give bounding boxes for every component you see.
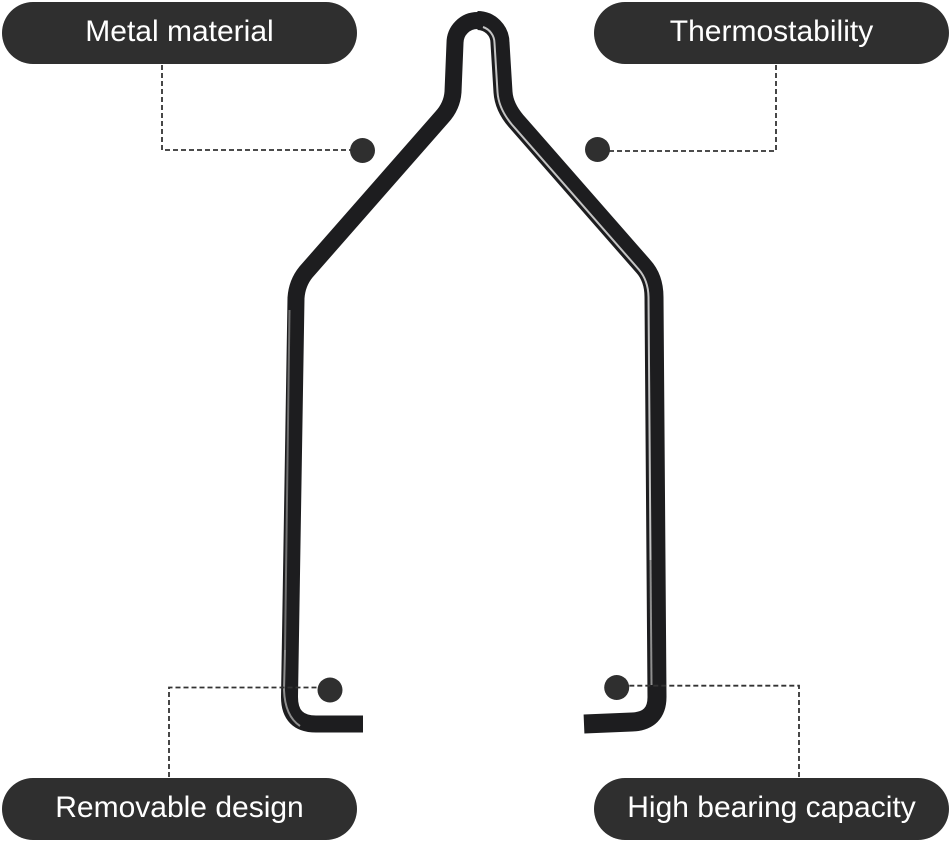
leader: removable design [169, 678, 342, 777]
label: high bearing capacity: High bearing capacity [627, 791, 916, 824]
label: removable design: Removable design [55, 791, 304, 824]
leader: thermostability [585, 65, 776, 162]
leader: metal material [162, 65, 375, 163]
label: high bearing capacity [594, 778, 949, 840]
wire clip [284, 20, 657, 726]
label: metal material: Metal material [85, 15, 274, 48]
label: metal material [2, 2, 357, 64]
label: thermostability [594, 2, 949, 64]
label: thermostability: Thermostability [670, 15, 873, 48]
leader: high bearing capacity [604, 675, 799, 777]
label: removable design [2, 778, 357, 840]
